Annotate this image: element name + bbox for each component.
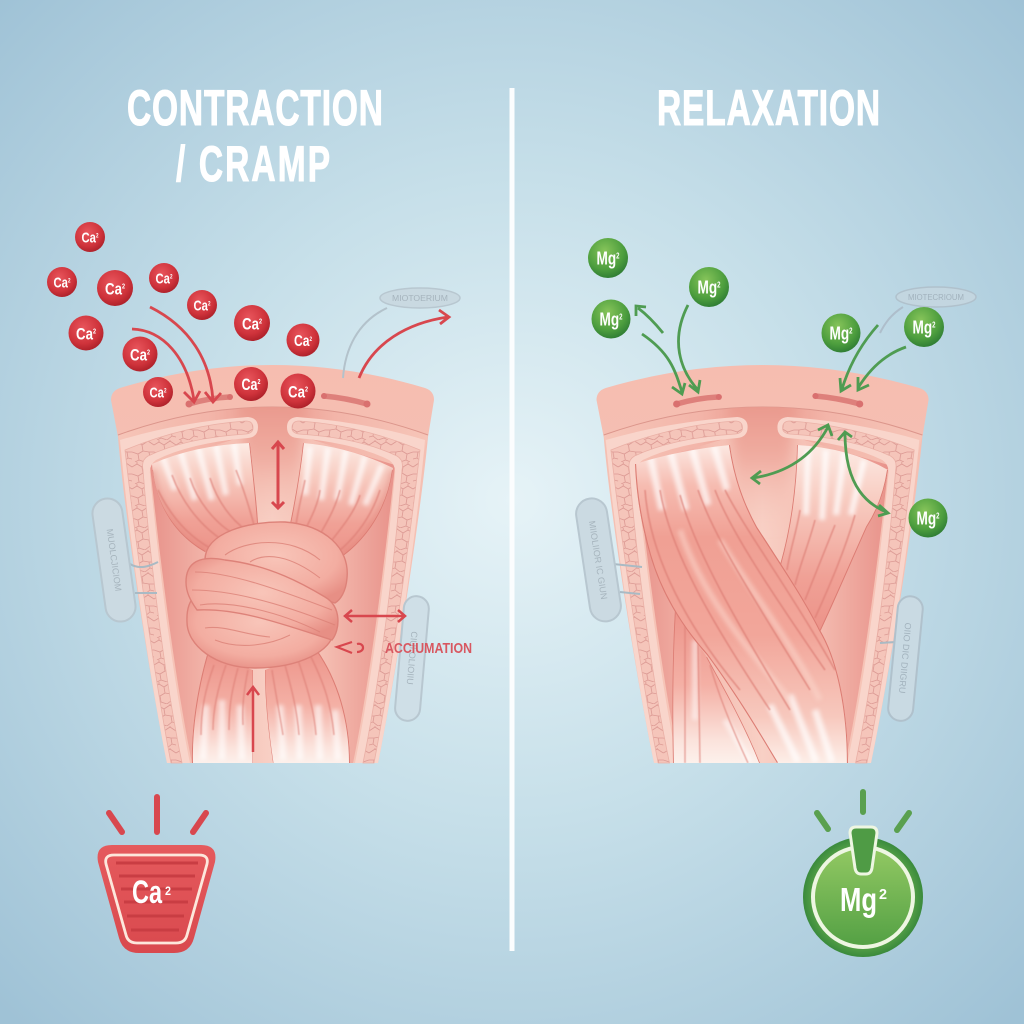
- magnesium ions: 2: [619, 312, 623, 322]
- magnesium ions: [588, 238, 948, 538]
- magnesium ions: Mg: [916, 508, 942, 528]
- magnesium ions: Mg: [830, 324, 856, 344]
- gray label: upper: [880, 287, 976, 333]
- calcium ions: 2: [208, 302, 211, 308]
- panel: relaxed muscle cross-section: [574, 287, 976, 765]
- icon: magnesium relaxation badge: 2: [879, 886, 887, 903]
- gray label: left: MIIOLIIOR IC GIUN: [587, 520, 609, 600]
- ions: red calcium arrows into channel: [132, 307, 221, 402]
- calcium ions: Ca: [294, 333, 314, 350]
- divider: [510, 88, 514, 951]
- muscle bundle: upper left: [152, 443, 258, 552]
- calcium ions: Ca: [156, 270, 175, 288]
- calcium ions: 2: [258, 379, 261, 386]
- gray label: left: MUOLCJICIOM: [105, 528, 123, 592]
- calcium ions: Ca: [82, 230, 101, 246]
- magnesium ions: 2: [717, 280, 721, 290]
- calcium ions: Ca: [288, 382, 310, 402]
- calcium ions: Ca: [54, 274, 73, 292]
- calcium ions: 2: [259, 318, 262, 326]
- muscle bundle: upper right: [290, 443, 393, 556]
- calcium ions: 2: [147, 350, 150, 356]
- icon: magnesium relaxation badge: [803, 792, 923, 957]
- magnesium ions: 2: [849, 326, 853, 336]
- calcium ions: 2: [170, 274, 173, 280]
- muscle bundle: lower left: [192, 655, 253, 763]
- arrow: lower upward: [247, 687, 259, 752]
- muscle bundle: lower left: [672, 612, 760, 763]
- calcium ions: Ca: [105, 280, 127, 298]
- title: relaxation: RELAXATION: [657, 80, 880, 137]
- calcium ions: 2: [68, 278, 71, 284]
- muscle bundle: lower right: [265, 653, 350, 763]
- arrow: spasm accumulation: [337, 610, 405, 653]
- icon: calcium contraction badge: [98, 797, 215, 953]
- title: contraction / cramp: CONTRACTION: [127, 80, 383, 137]
- calcium ions: 2: [93, 328, 96, 336]
- magnesium ions: 2: [936, 512, 940, 520]
- calcium ions: 2: [305, 386, 308, 394]
- label: accumulation: ACCIUMATION: [385, 641, 472, 657]
- gray label: left: [574, 496, 642, 624]
- gray label: right: [394, 595, 430, 722]
- calcium ions: Ca: [150, 384, 169, 402]
- muscle bundle: long diagonal: [630, 440, 852, 765]
- gray label: right: OIIO DIC DIIGRU: [897, 622, 913, 694]
- title: contraction / cramp: [127, 80, 383, 193]
- calcium ions: Ca: [76, 324, 98, 344]
- calcium ions: 2: [164, 388, 167, 394]
- title: contraction / cramp: / CRAMP: [176, 136, 330, 193]
- magnesium ions: 2: [616, 252, 620, 260]
- arrow: red efflux: [359, 310, 449, 378]
- calcium ions: [47, 222, 320, 408]
- calcium ions: Ca: [194, 298, 213, 314]
- gray label: left: [91, 497, 158, 623]
- icon: calcium contraction badge: 2: [165, 884, 171, 898]
- calcium ions: Ca: [242, 314, 264, 334]
- gray label: upper: MIOTECRIOUM: [908, 293, 964, 302]
- calcium ions: Ca: [242, 376, 263, 394]
- icon: magnesium relaxation badge: Mg: [840, 881, 877, 918]
- gray label: upper: MIOTOERIUM: [392, 294, 448, 303]
- arrow: center vertical: [272, 442, 284, 508]
- calcium ions: Ca: [130, 346, 152, 364]
- arrows: magnesium flow: [636, 305, 906, 516]
- icon: calcium contraction badge: Ca: [132, 874, 162, 910]
- gray label: upper: [343, 288, 460, 378]
- calcium ions: 2: [122, 284, 125, 290]
- muscle knot: [186, 522, 347, 668]
- magnesium ions: Mg: [600, 310, 626, 330]
- muscle bundle: rear right: [780, 445, 888, 631]
- gray label: right: CIUI OLIOIIU: [405, 631, 419, 685]
- gray label: right: [880, 595, 924, 722]
- magnesium ions: Mg: [698, 278, 724, 298]
- magnesium ions: 2: [932, 320, 936, 330]
- panel: contracted muscle cross-section: [91, 288, 472, 765]
- calcium ions: 2: [96, 234, 99, 240]
- magnesium ions: Mg: [596, 248, 622, 268]
- magnesium ions: Mg: [912, 318, 938, 338]
- calcium ions: 2: [309, 337, 312, 343]
